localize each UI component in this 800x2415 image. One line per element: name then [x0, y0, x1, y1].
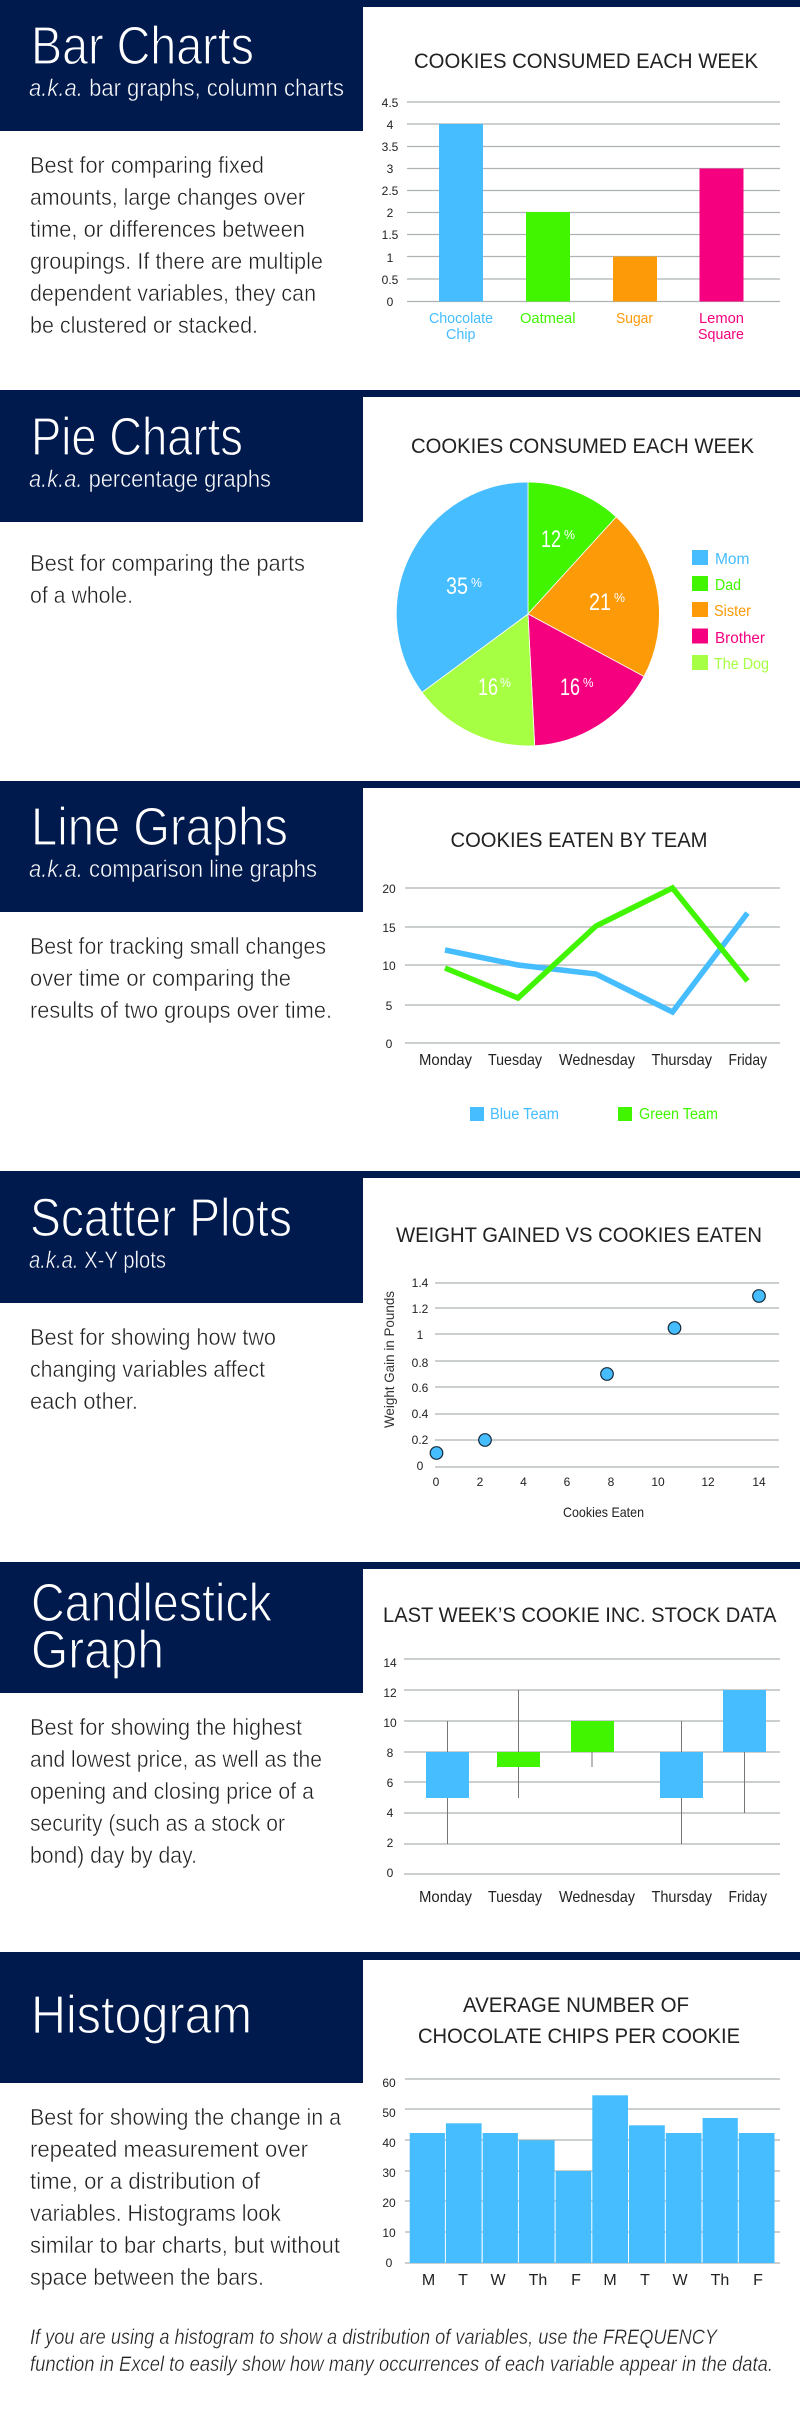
- text block: scatter plots description: changing variables affect: [30, 1356, 265, 1382]
- bar chart: 4: [387, 118, 394, 132]
- bar chart: Chocolate: [429, 310, 493, 327]
- bar chart: 1.5: [382, 228, 399, 242]
- scatter plot: 1.4: [412, 1276, 429, 1290]
- scatter plot: 2: [477, 1475, 484, 1489]
- text block: histogram description: Best for showing the change in a: [30, 2104, 342, 2130]
- histogram chart: 20: [382, 2196, 396, 2210]
- text block: scatter plots description: each other.: [30, 1388, 138, 1414]
- text block: candlestick description: [30, 1714, 322, 1868]
- header band: [0, 0, 800, 131]
- bar chart: Lemon: [699, 310, 744, 327]
- heading: line graphs: Line Graphs: [31, 797, 288, 857]
- text block: histogram description: similar to bar charts, but without: [30, 2232, 340, 2258]
- heading: pie charts: Pie Charts: [31, 407, 243, 467]
- pie value labels: 16: [560, 674, 580, 701]
- scatter plot: 8: [608, 1475, 615, 1489]
- scatter plot: 0: [417, 1459, 424, 1473]
- histogram chart: F: [571, 2272, 581, 2289]
- candlestick chart: 12: [383, 1686, 397, 1700]
- candlestick chart: Tuesday: [488, 1889, 542, 1906]
- histogram chart: W: [490, 2272, 506, 2289]
- histogram chart: 60: [382, 2076, 396, 2090]
- heading: histogram: Histogram: [31, 1985, 252, 2045]
- header band: [0, 1952, 800, 2083]
- chart title: candlestick: LAST WEEK’S COOKIE INC. STOCK DATA: [383, 1604, 776, 1627]
- subheading: line graphs: a.k.a. comparison line graphs: [29, 856, 317, 883]
- candlestick chart: 10: [383, 1716, 397, 1730]
- line graph: Tuesday: [488, 1052, 542, 1069]
- scatter plot: 0.4: [412, 1407, 429, 1421]
- legend: line graph: [470, 1106, 718, 1123]
- candlestick chart: Thursday: [652, 1889, 712, 1906]
- legend: pie chart: The Dog: [714, 656, 769, 673]
- scatter plot: 12: [701, 1475, 715, 1489]
- text block: pie charts description: Best for comparing the parts: [30, 550, 305, 576]
- candlestick chart: 8: [387, 1746, 394, 1760]
- heading: candlestick graph: Graph: [31, 1620, 164, 1680]
- bar chart: 2: [387, 206, 394, 220]
- candlestick chart: Wednesday: [559, 1889, 635, 1906]
- panel: line graphs: [0, 781, 800, 1123]
- pie value labels: 16: [478, 674, 498, 701]
- text block: bar charts description: time, or differences between: [30, 216, 305, 242]
- panel: histogram: [0, 1952, 800, 2376]
- header band: [0, 781, 800, 912]
- scatter plot: 1: [417, 1328, 424, 1342]
- text block: bar charts description: [30, 152, 323, 338]
- text block: line graphs description: [30, 933, 332, 1023]
- scatter plot: 0.8: [412, 1356, 429, 1370]
- line graph: Thursday: [652, 1052, 712, 1069]
- candlestick chart: 2: [387, 1836, 394, 1850]
- line graph: Friday: [728, 1052, 767, 1069]
- candlestick chart: [383, 1656, 780, 1906]
- histogram chart: W: [672, 2272, 688, 2289]
- candlestick chart: 0: [387, 1866, 394, 1880]
- histogram chart: T: [640, 2272, 650, 2289]
- text block: bar charts description: be clustered or stacked.: [30, 312, 258, 338]
- text block: line graphs description: over time or comparing the: [30, 965, 291, 991]
- bar chart: Sugar: [616, 310, 653, 327]
- text block: candlestick description: Best for showing the highest: [30, 1714, 302, 1740]
- text block: bar charts description: amounts, large changes over: [30, 184, 305, 210]
- text block: bar charts description: groupings. If there are multiple: [30, 248, 323, 274]
- bar chart: 4.5: [382, 96, 399, 110]
- text block: histogram description: repeated measurement over: [30, 2136, 308, 2162]
- histogram chart: T: [458, 2272, 468, 2289]
- line graph: 10: [382, 959, 396, 973]
- panel: candlestick graph: [0, 1562, 800, 1906]
- bar chart: 3.5: [382, 140, 399, 154]
- line graph: Wednesday: [559, 1052, 635, 1069]
- text block: pie charts description: of a whole.: [30, 582, 133, 608]
- candlestick chart: 14: [383, 1656, 397, 1670]
- text block: bar charts description: Best for comparing fixed: [30, 152, 264, 178]
- text block: line graphs description: results of two groups over time.: [30, 997, 332, 1023]
- histogram chart: M: [603, 2272, 617, 2289]
- panel: scatter plots: [0, 1171, 800, 1520]
- heading: candlestick graph: [31, 1573, 273, 1680]
- bar chart: 2.5: [382, 184, 399, 198]
- scatter plot: 4: [520, 1475, 527, 1489]
- pie value labels: %: [564, 528, 575, 542]
- line graph: [382, 882, 780, 1069]
- pie value labels: %: [583, 676, 594, 690]
- chart title: histogram: [418, 1994, 740, 2048]
- pie value labels: 35: [446, 573, 468, 600]
- pie value labels: 12: [541, 526, 561, 553]
- legend: line graph: Green Team: [639, 1106, 718, 1123]
- line graph: 20: [382, 882, 396, 896]
- pie value labels: 21: [589, 589, 611, 616]
- chart title: histogram: CHOCOLATE CHIPS PER COOKIE: [418, 2025, 740, 2048]
- pie value labels: %: [471, 576, 482, 590]
- legend: pie chart: Brother: [715, 630, 765, 647]
- scatter plot: Cookies Eaten: [563, 1504, 644, 1520]
- subheading: bar charts: a.k.a. bar graphs, column charts: [29, 75, 344, 102]
- histogram chart: M: [422, 2272, 435, 2289]
- line graph: Monday: [419, 1052, 472, 1069]
- header band: [0, 1562, 800, 1693]
- text block: histogram description: time, or a distribution of: [30, 2168, 260, 2194]
- panel: pie charts: [0, 390, 800, 746]
- panel: bar charts: [0, 0, 800, 343]
- scatter plot: 0.2: [412, 1433, 429, 1447]
- scatter plot: 0.6: [412, 1381, 429, 1395]
- text block: candlestick description: and lowest price, as well as the: [30, 1746, 322, 1772]
- candlestick chart: Friday: [728, 1889, 767, 1906]
- pie chart: [396, 482, 659, 746]
- text block: bar charts description: dependent variables, they can: [30, 280, 316, 306]
- text block: histogram description: variables. Histograms look: [30, 2200, 281, 2226]
- pie value labels: %: [614, 591, 625, 605]
- histogram chart: Th: [711, 2272, 729, 2289]
- pie value labels: [446, 526, 625, 701]
- footnote: If you are using a histogram to show a distribution of variables, use the FREQUENCY: [30, 2326, 719, 2349]
- line graph: 0: [386, 1037, 393, 1051]
- chart title: line graph: COOKIES EATEN BY TEAM: [450, 829, 708, 852]
- scatter plot: 10: [651, 1475, 665, 1489]
- bar chart: 0.5: [382, 273, 399, 287]
- heading: bar charts: Bar Charts: [31, 16, 254, 76]
- histogram chart: F: [753, 2272, 763, 2289]
- text block: candlestick description: opening and closing price of a: [30, 1778, 315, 1804]
- bar chart: Oatmeal: [520, 310, 576, 327]
- text block: candlestick description: bond) day by day.: [30, 1842, 197, 1868]
- scatter plot: 14: [752, 1475, 766, 1489]
- header band: [0, 390, 800, 522]
- text block: histogram description: [30, 2104, 342, 2290]
- scatter plot: 1.2: [412, 1302, 429, 1316]
- footnote: [30, 2326, 773, 2376]
- histogram chart: 40: [382, 2136, 396, 2150]
- scatter plot: Weight Gain in Pounds: [382, 1291, 397, 1428]
- histogram chart: 50: [382, 2106, 396, 2120]
- bar chart: [382, 96, 780, 343]
- histogram chart: Th: [529, 2272, 547, 2289]
- subheading: scatter plots: a.k.a. X-Y plots: [29, 1247, 166, 1274]
- scatter plot: [382, 1276, 779, 1520]
- text block: histogram description: space between the bars.: [30, 2264, 264, 2290]
- bar chart: 1: [387, 251, 394, 265]
- legend: pie chart: [692, 550, 769, 673]
- bar chart: 0: [387, 295, 394, 309]
- text block: scatter plots description: Best for showing how two: [30, 1324, 276, 1350]
- chart title: bar chart: COOKIES CONSUMED EACH WEEK: [414, 50, 758, 73]
- scatter plot: 0: [433, 1475, 440, 1489]
- scatter plot: 6: [564, 1475, 571, 1489]
- chart title: pie chart: COOKIES CONSUMED EACH WEEK: [411, 435, 754, 458]
- header band: [0, 1171, 800, 1303]
- chart title: scatter plot: WEIGHT GAINED VS COOKIES EATEN: [396, 1224, 762, 1247]
- chart title: histogram: AVERAGE NUMBER OF: [463, 1994, 689, 2017]
- bar chart: Square: [698, 326, 744, 343]
- heading: candlestick graph: Candlestick: [31, 1573, 273, 1633]
- legend: pie chart: Dad: [715, 577, 741, 594]
- histogram chart: 10: [382, 2226, 396, 2240]
- candlestick chart: Monday: [419, 1889, 472, 1906]
- line graph: 5: [386, 999, 393, 1013]
- candlestick chart: 4: [387, 1806, 394, 1820]
- histogram chart: 0: [386, 2256, 393, 2270]
- text block: line graphs description: Best for tracking small changes: [30, 933, 326, 959]
- bar chart: Chip: [446, 326, 476, 343]
- text block: scatter plots description: [30, 1324, 276, 1414]
- histogram chart: 30: [382, 2166, 396, 2180]
- legend: pie chart: Mom: [715, 551, 750, 568]
- heading: scatter plots: Scatter Plots: [30, 1188, 292, 1248]
- text block: pie charts description: [30, 550, 305, 608]
- text block: candlestick description: security (such as a stock or: [30, 1810, 285, 1836]
- legend: line graph: Blue Team: [490, 1106, 559, 1123]
- line graph: 15: [382, 921, 396, 935]
- pie value labels: %: [500, 676, 511, 690]
- subheading: pie charts: a.k.a. percentage graphs: [29, 466, 271, 493]
- bar chart: 3: [387, 162, 394, 176]
- histogram chart: [382, 2076, 780, 2289]
- legend: pie chart: Sister: [714, 603, 751, 620]
- candlestick chart: 6: [387, 1776, 394, 1790]
